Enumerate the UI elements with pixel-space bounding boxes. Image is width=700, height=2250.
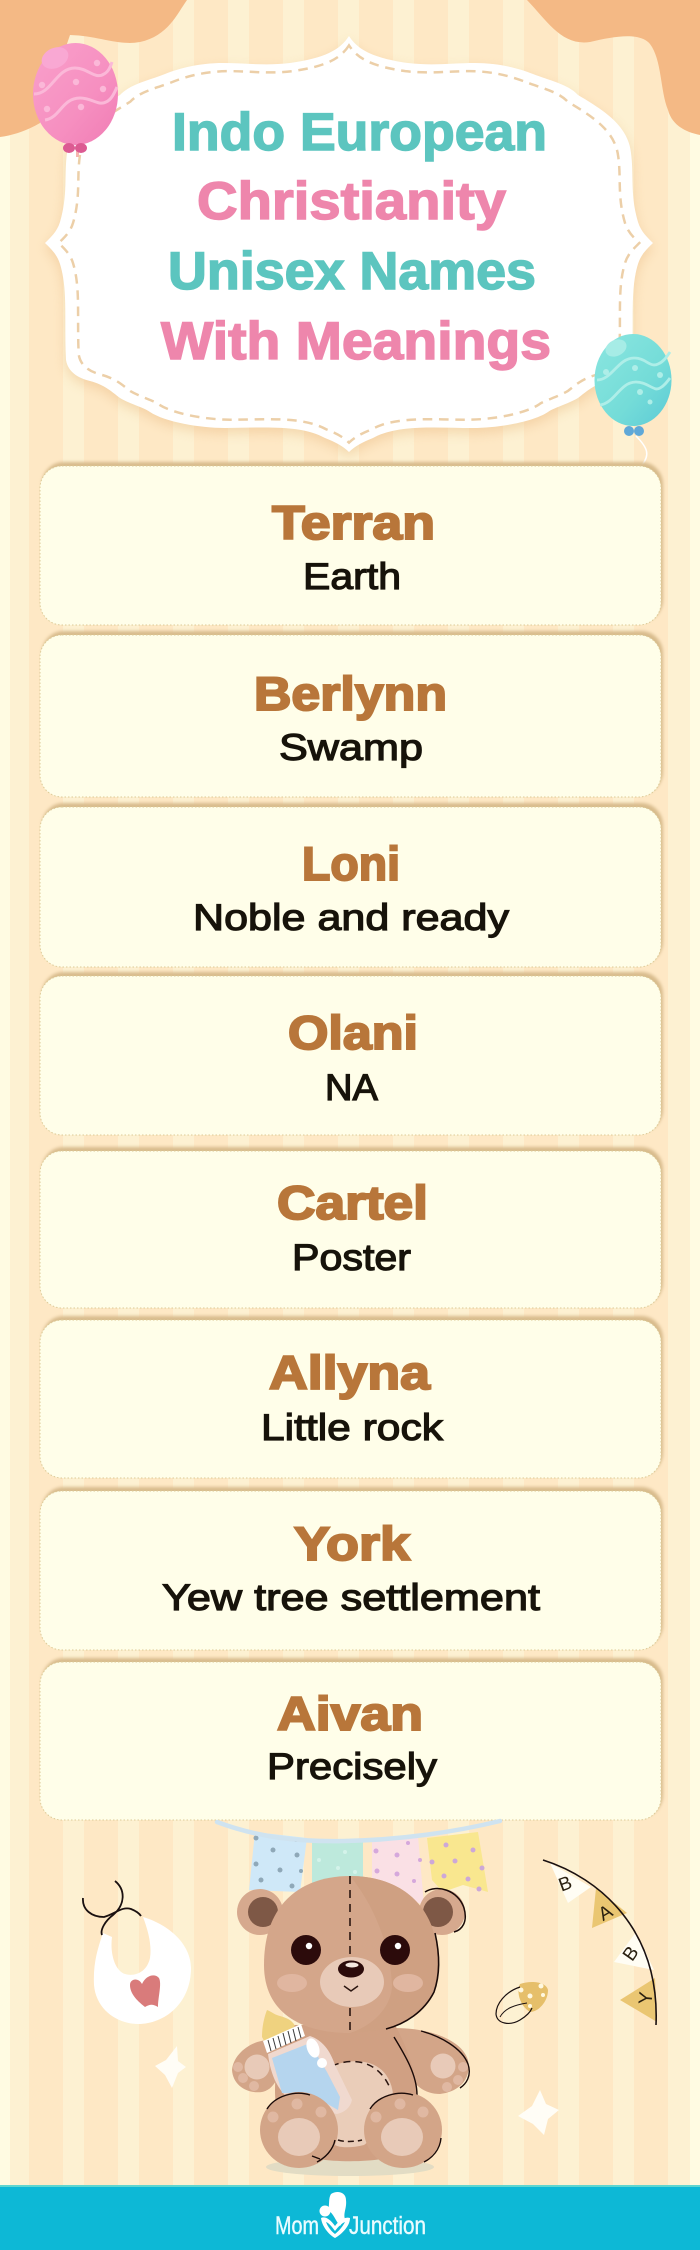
icon: safety pin — [496, 1982, 548, 2023]
header drip left — [0, 0, 187, 137]
icon: BABY banner — [543, 1860, 658, 2025]
body — [275, 2025, 418, 2161]
meaning: Little rock: Little rock — [261, 1407, 444, 1448]
left arm — [232, 2040, 281, 2092]
balloon: teal — [594, 334, 672, 474]
title: Indo European — [172, 103, 547, 162]
bunting flags — [217, 1821, 500, 1905]
cheeks — [277, 1974, 307, 1992]
mouth — [344, 1986, 358, 1991]
title plaque — [45, 36, 653, 457]
meaning: Earth: Earth — [303, 556, 401, 597]
title: Unisex Names — [168, 242, 536, 301]
tummy patch — [329, 2061, 393, 2147]
left foot — [260, 2092, 338, 2168]
logo wordmark Mom: Mom — [275, 2212, 319, 2240]
stitch — [349, 1876, 351, 2033]
panel: Terran — [40, 462, 663, 625]
right foot — [364, 2092, 442, 2168]
icon: bib — [83, 1881, 191, 2024]
name: Loni: Loni — [302, 837, 400, 890]
bottle — [262, 2010, 352, 2114]
name: Allyna: Allyna — [269, 1346, 431, 1399]
icon: star left — [155, 2046, 186, 2088]
title — [161, 103, 551, 371]
name: Olani: Olani — [288, 1006, 418, 1059]
right arm — [395, 2028, 469, 2094]
meaning: NA: NA — [325, 1067, 378, 1108]
ears — [237, 1889, 283, 1935]
name: York: York — [294, 1517, 411, 1570]
illustration: teddy bear — [232, 1876, 469, 2176]
icon: BABY banner: A — [595, 1901, 617, 1926]
meaning: Swamp: Swamp — [279, 727, 423, 768]
shadow under bear — [266, 2158, 434, 2176]
panel: Aivan — [40, 1658, 663, 1820]
title: With Meanings — [161, 312, 551, 371]
icon: heart — [130, 1975, 160, 2007]
name: Terran: Terran — [272, 496, 435, 549]
panel: Berlynn — [40, 631, 663, 797]
panel: York — [40, 1487, 663, 1650]
nose — [338, 1960, 364, 1978]
panel: Cartel — [40, 1147, 663, 1308]
icon: star right — [518, 2090, 559, 2135]
meaning: Poster: Poster — [292, 1237, 411, 1278]
name: Cartel: Cartel — [277, 1176, 428, 1229]
name: Berlynn: Berlynn — [254, 667, 447, 720]
header drip right — [527, 0, 700, 135]
icon: BABY banner: B — [556, 1872, 575, 1896]
eyes — [291, 1935, 321, 1965]
panel: Olani — [40, 972, 663, 1135]
meaning: Precisely: Precisely — [267, 1746, 438, 1787]
panel: Allyna — [40, 1316, 663, 1478]
panel: Loni — [40, 803, 663, 967]
balloon: pink — [33, 43, 118, 157]
logo icon — [320, 2192, 350, 2238]
meaning: Yew tree settlement: Yew tree settlement — [162, 1577, 541, 1618]
logo wordmark Junction: Junction — [349, 2212, 426, 2240]
icon: BABY banner: Y — [635, 1991, 658, 2005]
title: Christianity — [197, 172, 507, 231]
footer bar — [0, 2185, 700, 2250]
name: Aivan: Aivan — [277, 1687, 423, 1740]
icon: BABY banner: B — [619, 1943, 643, 1965]
logo: MomJunction — [275, 2192, 350, 2240]
head — [264, 1876, 438, 2033]
meaning: Noble and ready: Noble and ready — [193, 897, 510, 938]
muzzle — [320, 1957, 384, 2007]
